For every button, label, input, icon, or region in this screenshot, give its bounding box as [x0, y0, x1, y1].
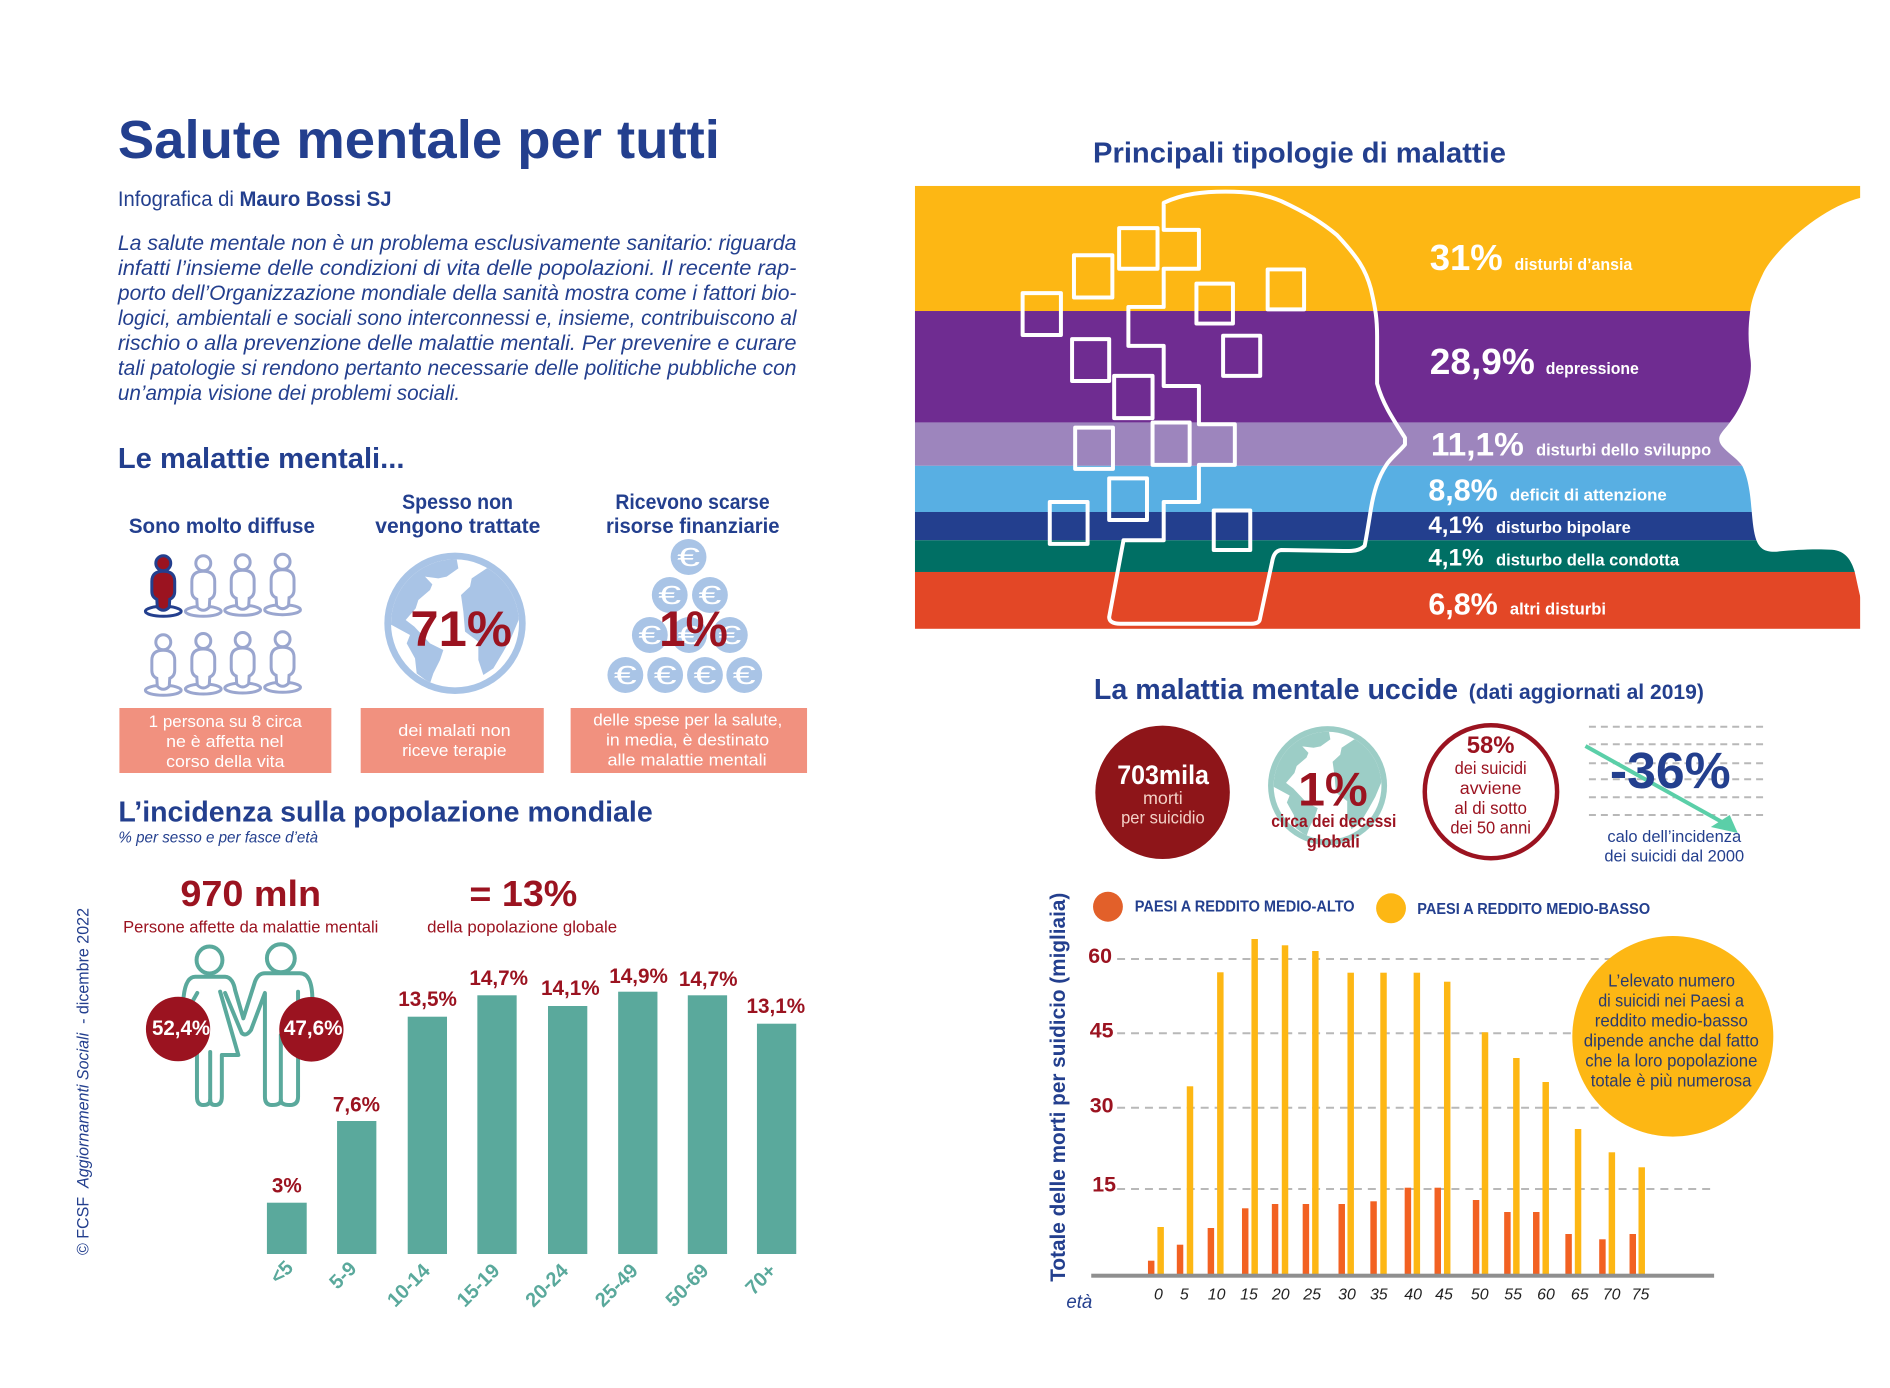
heading: principali tipologie: Principali tipologie di malattie — [1093, 137, 1506, 169]
panel: spesso non vengono trattate — [361, 491, 544, 773]
band label: depressione — [1430, 342, 1639, 382]
heading: le malattie mentali: Le malattie mentali... — [118, 443, 404, 475]
stat: 58% under 50: dei suicidi — [1455, 758, 1527, 778]
intro paragraph: logici, ambientali e sociali sono interconnessi e, insieme, contribuiscono al — [118, 307, 798, 330]
intro paragraph: un’ampia visione dei problemi sociali. — [118, 382, 460, 405]
caption box: delle spese per la salute, — [593, 711, 782, 730]
subheading — [375, 491, 540, 538]
y axis ticks: 30 — [1090, 1093, 1114, 1117]
caption box: dei malati non — [398, 721, 511, 740]
legend: PAESI A REDDITO MEDIO-BASSO — [1417, 901, 1650, 918]
bar chart: incidence by age: 5-9 — [325, 1258, 361, 1294]
stat: 1% deaths with globe: 1% — [1298, 764, 1368, 816]
x axis ages: 50 — [1471, 1286, 1489, 1303]
intro paragraph: rischio o alla prevenzione delle malattie mentali. Per prevenire e curare — [118, 332, 796, 355]
header and introduction — [117, 110, 798, 475]
intro paragraph — [117, 232, 798, 405]
x axis ages: 60 — [1537, 1286, 1555, 1303]
stat: 1% deaths with globe: circa dei decessi — [1271, 811, 1396, 831]
section: suicide chart — [1047, 893, 1773, 1313]
bar chart: incidence by age: 14,7% — [469, 967, 528, 990]
stat: -36% trend: dei suicidi dal 2000 — [1604, 847, 1744, 866]
icon: pile of euro coins: € — [654, 662, 678, 690]
y axis ticks — [1088, 944, 1116, 1197]
callout: yellow circle note: reddito medio-basso — [1595, 1011, 1748, 1031]
stat: 13%: = 13% — [469, 873, 577, 914]
stat: -36% trend: calo dell’incidenza — [1607, 827, 1742, 846]
caption box: in media, è destinato — [606, 731, 769, 750]
callout: yellow circle note: che la loro popolazione — [1585, 1051, 1757, 1071]
stat: 703mila: per suicidio — [1121, 807, 1205, 827]
panel: head stacked bands — [915, 186, 1875, 637]
icon: globe — [382, 553, 528, 694]
band label: condotta — [1428, 545, 1680, 572]
band label: bipolare — [1428, 512, 1631, 539]
icon: pile of euro coins: € — [733, 662, 757, 690]
bar chart: incidence by age: 13,5% — [398, 988, 457, 1011]
x axis ages — [1154, 1286, 1649, 1303]
stat: 71%: 71% — [410, 601, 512, 657]
legend: PAESI A REDDITO MEDIO-ALTO — [1135, 899, 1355, 916]
x axis ages: 15 — [1240, 1286, 1258, 1303]
y axis ticks: 15 — [1092, 1173, 1116, 1197]
stat: 1%: 1% — [659, 601, 728, 657]
panel: sono molto diffuse — [119, 515, 331, 773]
icon: pile of euro coins: € — [694, 662, 717, 690]
face profile cut-out — [1719, 186, 1875, 637]
icon: pile of euro coins: € — [718, 622, 742, 650]
icon: couple with sex shares: 52,4% — [152, 1017, 210, 1040]
bar chart: incidence by age: 7,6% — [333, 1094, 380, 1117]
arrow: decline — [1585, 746, 1738, 833]
x axis line — [1091, 1274, 1714, 1278]
intro paragraph: infatti l’insieme delle condizioni di vita delle popolazioni. Il recente rap- — [118, 257, 796, 280]
callout: yellow circle note: totale è più numerosa — [1591, 1071, 1751, 1091]
stat: 970 mln: 970 mln — [180, 873, 321, 914]
subheading — [606, 491, 780, 538]
panel: ricevono scarse risorse finanziarie — [571, 491, 807, 773]
colour bands — [915, 186, 1860, 629]
legend — [1093, 892, 1650, 923]
subheading note: % per sesso e per fasce d’età — [118, 830, 318, 847]
stat: 970 mln: Persone affette da malattie mentali — [123, 918, 378, 937]
bar chart: incidence by age: 14,7% — [679, 968, 738, 991]
subheading: Sono molto diffuse — [129, 515, 315, 538]
heading: la malattia mentale uccide: La malattia mentale uccide — [1094, 674, 1458, 706]
x axis ages: 35 — [1370, 1286, 1388, 1303]
x axis ages: 70 — [1603, 1286, 1621, 1303]
band label: altri: 6,8% — [1428, 586, 1498, 621]
caption box — [119, 708, 331, 773]
heading: incidenza: L’incidenza sulla popolazione mondiale — [118, 797, 653, 829]
stat: -36% trend — [1585, 727, 1767, 866]
stat: 58% under 50: 58% — [1467, 732, 1515, 759]
band label: attenzione: 8,8% — [1428, 472, 1498, 507]
caption box: corso della vita — [166, 752, 285, 771]
band label: bipolare: 4,1% — [1428, 512, 1484, 539]
x axis ages: 20 — [1271, 1286, 1290, 1303]
caption box — [571, 708, 807, 773]
title: Salute mentale per tutti — [118, 110, 720, 170]
heading: la malattia mentale uccide: (dati aggiornati al 2019) — [1469, 681, 1704, 704]
bar chart: incidence by age: 14,1% — [541, 977, 600, 1000]
caption box: 1 persona su 8 circa — [149, 712, 302, 731]
subheading: Ricevono scarse — [615, 491, 770, 514]
copyright: © FCSF Aggiornamenti Sociali - dicembre 2022 — [74, 908, 92, 1255]
section: disease types — [915, 137, 1875, 637]
icon: couple with sex shares — [146, 944, 344, 1105]
bar chart: suicides by age and income — [1047, 893, 1714, 1313]
x axis ages: 10 — [1208, 1286, 1226, 1303]
band label: ansia: 31% — [1430, 238, 1503, 278]
band label: ansia — [1430, 238, 1633, 278]
stat: -36% trend: -36% — [1610, 742, 1731, 799]
stat: 13%: della popolazione globale — [427, 918, 617, 937]
band label: ansia: disturbi d’ansia — [1515, 255, 1633, 274]
stat: 703mila: 703mila — [1117, 760, 1210, 790]
icon: people, 1 in 8 highlighted — [145, 554, 300, 695]
bar chart: incidence by age: 50-69 — [662, 1260, 713, 1312]
byline: Infografica di Mauro Bossi SJ — [118, 188, 391, 211]
section: three facts — [118, 491, 807, 847]
callout: yellow circle note: di suicidi nei Paesi a — [1598, 991, 1744, 1011]
bar chart: incidence by age: 14,9% — [609, 965, 668, 988]
callout: yellow circle note: dipende anche dal fatto — [1584, 1031, 1759, 1051]
section: suicide statistics — [1093, 674, 1767, 923]
stat: 703mila — [1095, 726, 1230, 859]
intro paragraph: La salute mentale non è un problema esclusivamente sanitario: riguarda — [118, 232, 796, 255]
band label: sviluppo: disturbi dello sviluppo — [1536, 441, 1711, 460]
x axis ages: 30 — [1338, 1286, 1356, 1303]
stat: 970 mln — [123, 873, 378, 937]
band label: altri: altri disturbi — [1510, 599, 1606, 618]
x axis ages: 75 — [1632, 1286, 1649, 1303]
band label: depressione: depressione — [1546, 359, 1639, 378]
y axis ticks: 60 — [1088, 944, 1112, 968]
stat: 58% under 50: avviene — [1460, 778, 1521, 798]
bar chart: incidence by age: 13,1% — [747, 995, 805, 1018]
bar chart: incidence by age: 15-19 — [453, 1260, 504, 1312]
icon: pile of euro coins: € — [678, 622, 701, 650]
caption box: ne è affetta nel — [166, 732, 283, 751]
x axis ages: 40 — [1404, 1286, 1422, 1303]
caption box: riceve terapie — [402, 741, 507, 760]
band label: altri — [1428, 586, 1606, 621]
y axis title: Totale delle morti per suidicio (migliaia) — [1047, 893, 1070, 1282]
bar chart: incidence by age: 70+ — [741, 1260, 781, 1300]
band label: sviluppo — [1431, 426, 1711, 463]
band label: condotta: 4,1% — [1428, 545, 1484, 572]
subheading: Spesso non — [402, 491, 513, 514]
x axis ages: 65 — [1571, 1286, 1589, 1303]
icon: pile of euro coins — [607, 539, 762, 693]
stat: 58% under 50: dei 50 anni — [1450, 817, 1531, 837]
icon: pile of euro coins: € — [677, 544, 701, 572]
x axis ages: 45 — [1435, 1286, 1453, 1303]
stat: 1% deaths with globe: globali — [1307, 832, 1360, 852]
caption box: alle malattie mentali — [607, 751, 767, 770]
bar chart: incidence by age: 20-24 — [522, 1260, 573, 1312]
head outline and mosaic — [1023, 192, 1405, 624]
band label: attenzione — [1428, 472, 1667, 507]
band label: depressione: 28,9% — [1430, 342, 1535, 382]
icon: pile of euro coins: € — [698, 582, 722, 610]
band label: bipolare: disturbo bipolare — [1496, 518, 1631, 537]
bar chart: incidence by age: 25-49 — [591, 1260, 643, 1312]
orange bars — [1148, 1188, 1636, 1276]
yellow bars — [1157, 939, 1645, 1276]
subheading: risorse finanziarie — [606, 515, 780, 538]
stat: 703mila: morti — [1143, 788, 1183, 808]
band label: attenzione: deficit di attenzione — [1510, 485, 1667, 504]
stat: 58% under 50: al di sotto — [1454, 798, 1527, 818]
bar chart: incidence by age: <5 — [266, 1257, 298, 1289]
x axis ages: 55 — [1504, 1286, 1522, 1303]
x axis ages: 0 — [1154, 1286, 1163, 1303]
icon: couple with sex shares: 47,6% — [284, 1017, 343, 1040]
bar chart: incidence by age: 10-14 — [383, 1260, 435, 1312]
icon: pile of euro coins: € — [614, 662, 638, 690]
icon: pile of euro coins: € — [658, 582, 682, 610]
band label: condotta: disturbo della condotta — [1496, 551, 1680, 570]
heading: la malattia mentale uccide — [1094, 674, 1704, 706]
icon: pile of euro coins: € — [638, 622, 662, 650]
y axis ticks: 45 — [1090, 1019, 1114, 1043]
x axis ages: 5 — [1180, 1286, 1189, 1303]
intro paragraph: porto dell’Organizzazione mondiale della sanità mostra come i fattori bio- — [117, 282, 796, 305]
x axis ages: 25 — [1302, 1286, 1321, 1303]
band label: sviluppo: 11,1% — [1431, 426, 1524, 463]
stat: 1% deaths with globe — [1266, 726, 1396, 852]
subheading: vengono trattate — [375, 515, 540, 538]
bar chart: incidence by age: 3% — [272, 1175, 302, 1198]
bar chart: incidence by age — [266, 965, 805, 1312]
intro paragraph: tali patologie si rendono pertanto necessarie delle politiche pubbliche con — [118, 357, 796, 380]
caption box — [361, 708, 544, 773]
section: world incidence — [74, 873, 805, 1312]
callout: yellow circle note: L’elevato numero — [1608, 971, 1735, 991]
stat: 58% under 50 — [1425, 725, 1557, 858]
callout: yellow circle note — [1572, 936, 1773, 1137]
stat: 13% — [427, 873, 617, 937]
x axis title: età — [1066, 1292, 1092, 1313]
